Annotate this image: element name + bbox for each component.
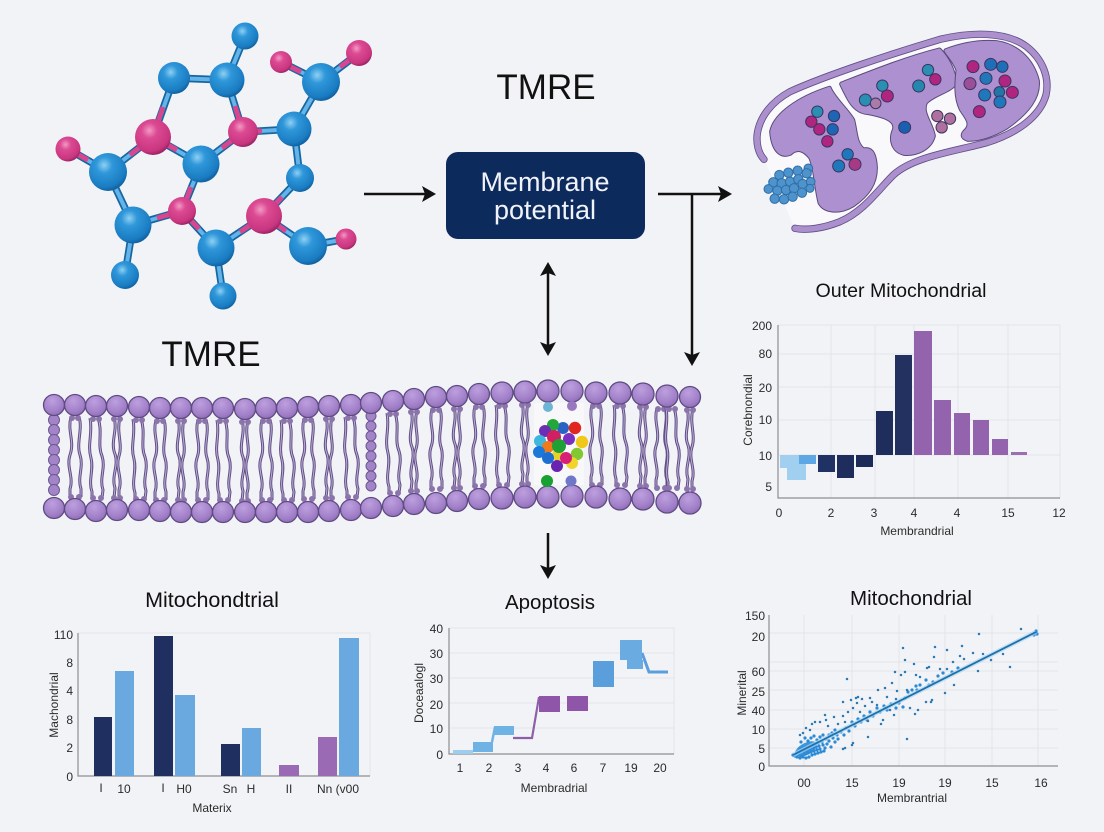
chart: Apoptosis step chart xyxy=(412,591,674,795)
y axis labels: 5 xyxy=(758,742,765,756)
x axis title: Membrantrial xyxy=(877,791,947,805)
icon: mitochondrion cross-section xyxy=(757,34,1047,229)
x axis labels: 4 xyxy=(954,506,961,520)
x axis labels: H0 xyxy=(176,782,192,796)
colored protein cluster in channel xyxy=(533,401,588,487)
y axis labels xyxy=(54,628,73,784)
chart title: Mitochondtrial xyxy=(145,588,279,612)
x axis title: Materix xyxy=(192,801,232,815)
y axis title: Minerital xyxy=(735,670,749,716)
bars xyxy=(94,636,359,776)
chart title: Outer Mitochondrial xyxy=(816,280,986,302)
x axis labels: 15 xyxy=(1001,506,1015,520)
x axis labels: Sn xyxy=(223,782,237,796)
x axis labels: 10 xyxy=(117,782,131,796)
lobe: middle crista xyxy=(842,50,955,153)
particles inside mitochondrion xyxy=(806,58,1018,172)
icon: TMRE molecule ball-and-stick model xyxy=(56,22,372,310)
y axis labels: 40 xyxy=(752,704,765,718)
x axis labels: 3 xyxy=(871,506,878,520)
y axis labels: 8 xyxy=(66,713,73,727)
x axis labels: 15 xyxy=(845,776,859,790)
scatter points xyxy=(793,629,1037,760)
y axis labels: 0 xyxy=(758,760,765,774)
x axis labels: II xyxy=(286,782,292,796)
x axis labels: 19 xyxy=(892,776,906,790)
arrow: double-headed potential to membrane xyxy=(540,262,556,356)
heading: TMRE top: TMRE xyxy=(496,68,596,107)
x axis labels: 6 xyxy=(571,761,578,775)
y axis labels: 0 xyxy=(436,748,443,762)
arrow: branching to mitochondrion and chart xyxy=(658,186,732,366)
box: Membrane potential: potential xyxy=(494,195,596,225)
x axis labels: 0 xyxy=(776,506,783,520)
cholesterol bead columns xyxy=(48,411,376,496)
x axis labels: I xyxy=(161,781,165,795)
y axis labels: 0 xyxy=(66,770,73,784)
blue particle cluster xyxy=(764,164,815,204)
y axis labels xyxy=(430,622,443,762)
x axis labels: 00 xyxy=(797,776,811,790)
y axis labels: 2 xyxy=(66,741,73,755)
y axis labels: 20 xyxy=(430,698,443,712)
y axis labels: 8 xyxy=(66,656,73,670)
y axis title: Doceaalogl xyxy=(412,663,426,723)
x axis labels: H xyxy=(247,782,255,796)
x axis labels: 2 xyxy=(486,761,493,775)
x axis labels: 19 xyxy=(624,761,638,775)
x axis labels: 4 xyxy=(911,506,918,520)
chart: Mitochondrial grouped bar chart xyxy=(47,588,370,815)
x axis labels: 16 xyxy=(1034,776,1048,790)
heading: TMRE membrane label: TMRE xyxy=(161,335,261,374)
bottom phospholipid heads xyxy=(44,485,701,522)
y axis labels: 80 xyxy=(759,347,772,361)
x axis labels: 7 xyxy=(600,761,607,775)
chart: Mitochondrial scatter plot xyxy=(735,587,1058,805)
lipid tails xyxy=(68,402,696,504)
chart title: Mitochondrial xyxy=(850,587,972,610)
y axis labels: 4 xyxy=(66,684,73,698)
bars xyxy=(780,331,1027,480)
y axis labels: 60 xyxy=(752,665,765,679)
x axis labels: 4 xyxy=(543,761,550,775)
trend line xyxy=(793,632,1036,755)
x axis labels: 15 xyxy=(985,776,999,790)
step series xyxy=(453,640,668,754)
y axis labels: 40 xyxy=(430,622,443,636)
y axis title: Corebnondial xyxy=(741,374,755,446)
x axis labels: 1 xyxy=(457,761,464,775)
y axis labels: 5 xyxy=(765,480,772,494)
x axis title: Membradrial xyxy=(521,781,587,795)
y axis labels xyxy=(752,319,772,494)
x axis labels: 19 xyxy=(938,776,952,790)
x axis labels: 3 xyxy=(515,761,522,775)
diagram: lipid bilayer membrane xyxy=(44,380,701,522)
top phospholipid heads xyxy=(44,380,700,420)
x axis labels: 2 xyxy=(828,506,835,520)
y axis labels: 110 xyxy=(54,628,73,642)
y axis labels: 25 xyxy=(752,685,765,699)
x axis labels: 20 xyxy=(653,761,667,775)
lobe: right crista xyxy=(946,42,1037,139)
x axis labels xyxy=(457,761,667,775)
x axis labels: 12 xyxy=(1052,506,1066,520)
chart title: Apoptosis xyxy=(505,591,595,614)
x axis labels: Nn (v00 xyxy=(317,782,359,796)
box: Membrane potential: Membrane xyxy=(480,167,610,197)
x axis labels xyxy=(797,776,1048,790)
y axis labels: 20 xyxy=(752,630,765,644)
y axis labels: 200 xyxy=(752,319,772,333)
y axis labels: 10 xyxy=(430,722,443,736)
y axis title: Machondrial xyxy=(47,672,61,738)
arrow: membrane to apoptosis xyxy=(540,533,556,579)
box: Membrane potential xyxy=(446,152,645,239)
x axis title: Membrandrial xyxy=(880,524,954,538)
y axis labels: 30 xyxy=(430,647,443,661)
y axis labels: 30 xyxy=(430,672,443,686)
y axis labels xyxy=(745,609,765,774)
y axis labels: 20 xyxy=(759,381,772,395)
x axis labels xyxy=(99,781,359,796)
x axis labels: I xyxy=(99,781,103,795)
y axis labels: 10 xyxy=(759,449,772,463)
y axis labels: 10 xyxy=(752,723,765,737)
arrow: molecule to membrane potential xyxy=(364,186,436,202)
x axis labels xyxy=(776,506,1066,520)
y axis labels: 10 xyxy=(759,413,772,427)
lobe: left crista xyxy=(772,88,875,210)
chart: Outer Mitochondrial bar chart xyxy=(741,280,1066,538)
y axis labels: 150 xyxy=(745,609,765,623)
